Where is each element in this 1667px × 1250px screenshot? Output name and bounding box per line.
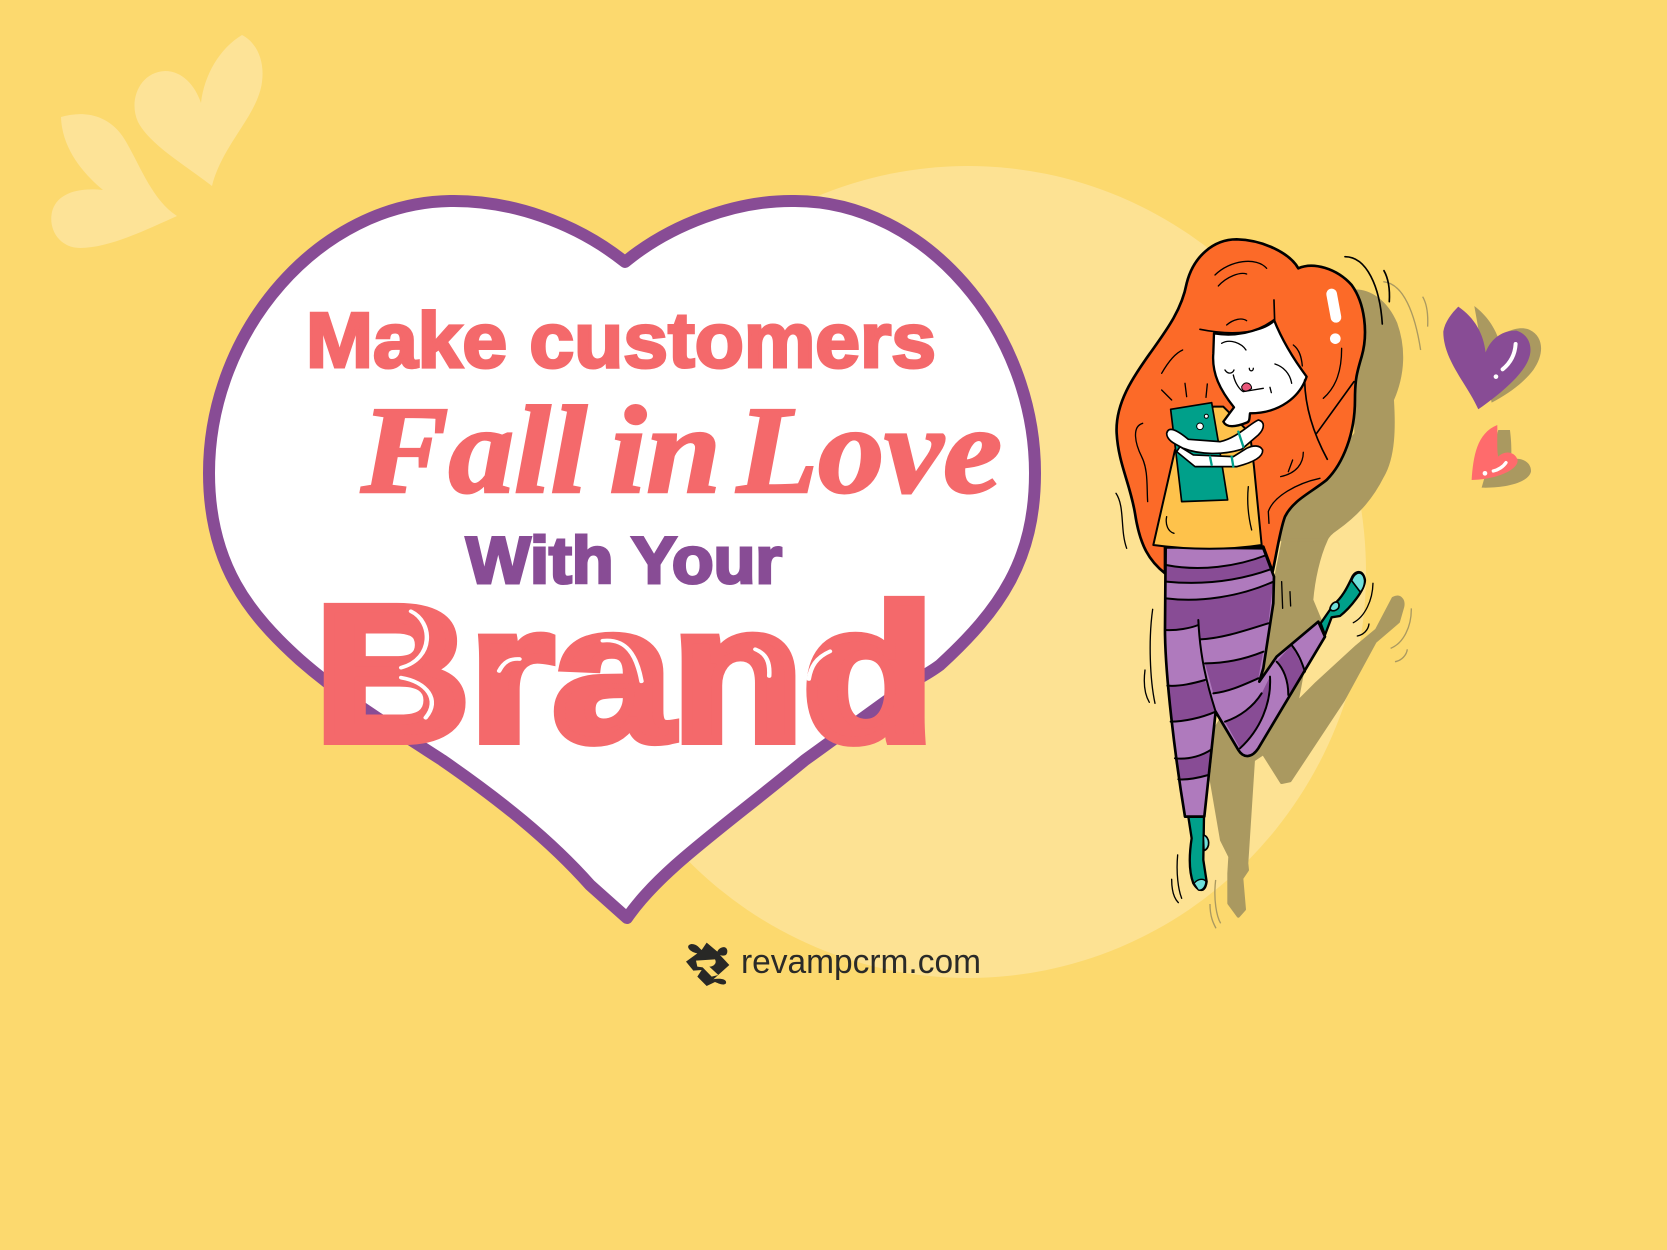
- headline: fall in love: [360, 382, 1002, 520]
- girl shadow: [1210, 282, 1428, 928]
- headline: fall in love: Love: [736, 382, 1002, 520]
- legs and feet: [1144, 547, 1373, 903]
- icon: purple heart: [1443, 306, 1541, 409]
- headline: fall in love: in: [609, 382, 721, 520]
- hair: [1117, 239, 1365, 573]
- lips: [1242, 383, 1252, 391]
- website address: revampcrm.com: [741, 943, 981, 981]
- motion lines around legs: [1144, 582, 1373, 903]
- logo and website: [686, 943, 981, 986]
- icon: coral heart: [1472, 425, 1531, 488]
- headline: fall in love: Fall: [360, 382, 587, 520]
- icon: puzzle logo: [686, 943, 729, 986]
- shirt: [1153, 407, 1262, 549]
- pants: [1165, 547, 1325, 817]
- upper body: [1116, 239, 1389, 573]
- standing foot: [1188, 817, 1207, 890]
- background circle: [570, 166, 1366, 978]
- face: [1213, 320, 1307, 426]
- headline: brand: Brand: [315, 566, 934, 781]
- decorative hearts top left: [51, 35, 263, 248]
- arms: [1177, 446, 1263, 467]
- girl illustration: [1116, 239, 1389, 903]
- floating hearts: [1443, 306, 1541, 488]
- hair highlights: [1332, 294, 1336, 317]
- hair strands and face lines: [1116, 257, 1389, 548]
- main heart: [209, 201, 1035, 918]
- headline: make customers: Make customers: [306, 296, 936, 384]
- phone: [1171, 403, 1228, 502]
- headline: with your: With Your: [466, 523, 782, 597]
- raised foot: [1321, 572, 1365, 635]
